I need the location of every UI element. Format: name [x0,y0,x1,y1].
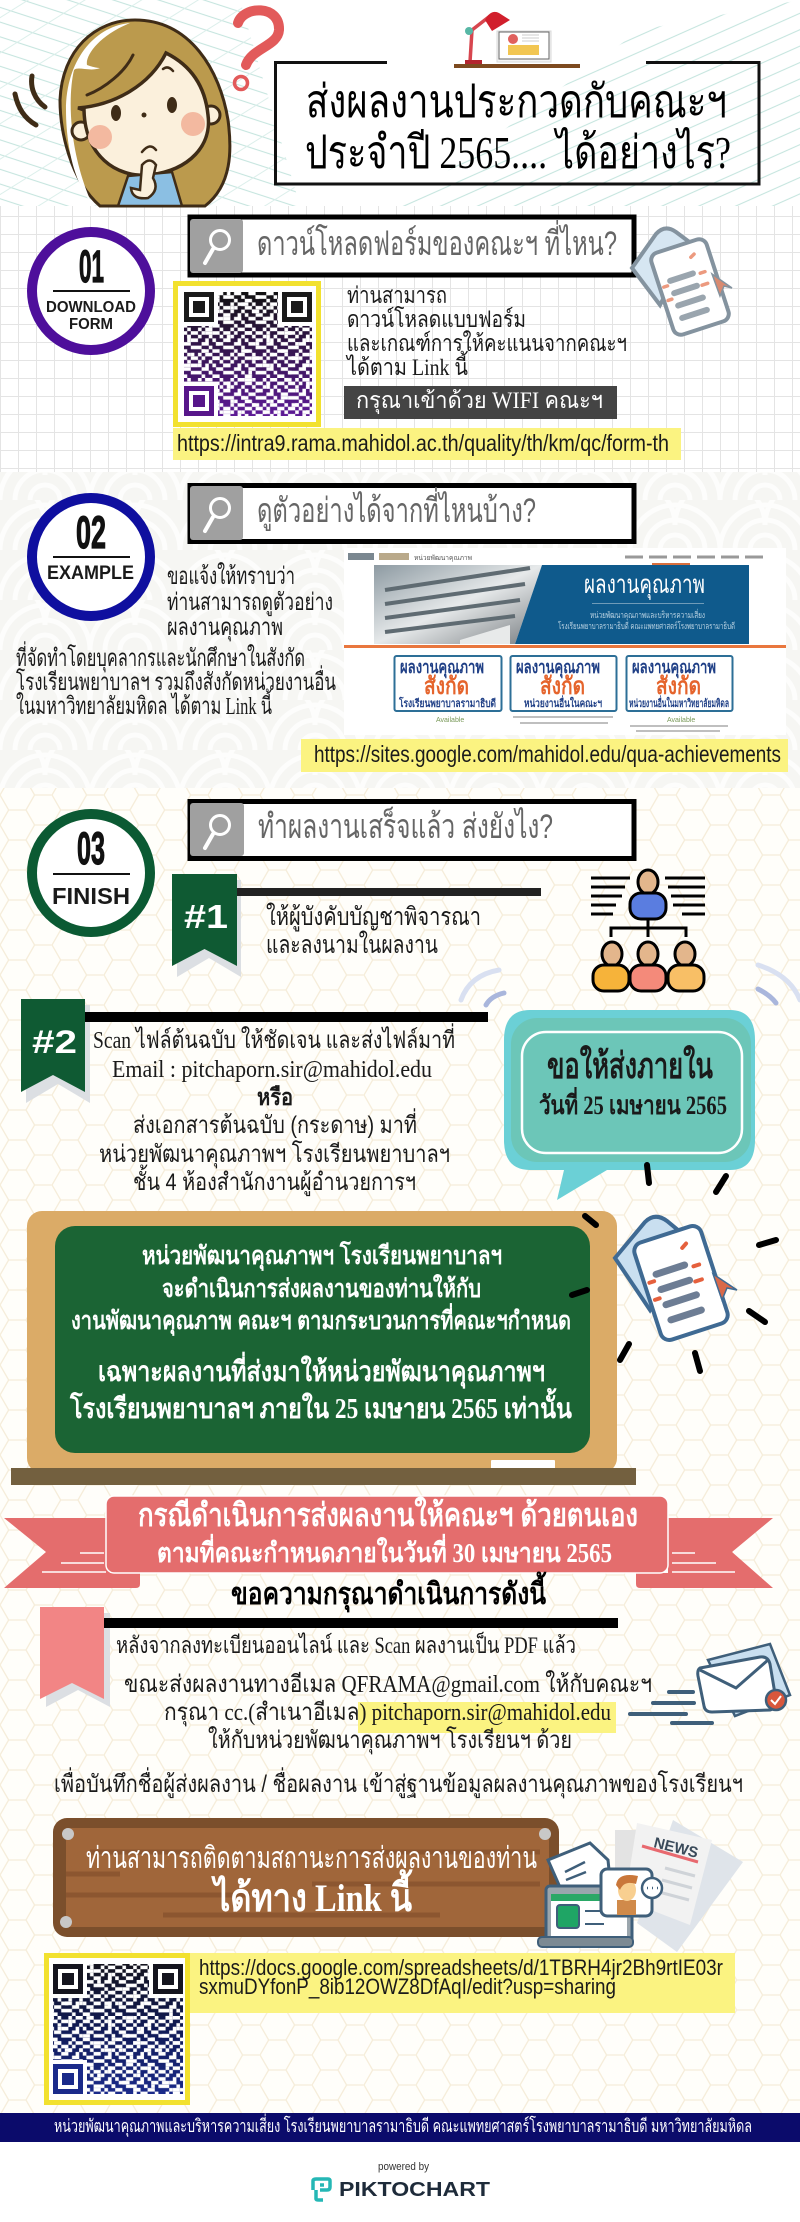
background: scallop section [0,472,800,788]
heading: please proceed: ขอความกรุณาดำเนินการดังนี้ [231,1571,547,1613]
icon: documents [632,228,732,337]
callout: deadline speech bubble: ขอให้ส่งภายใน [547,1044,713,1086]
title box [276,62,759,184]
pink ribbon and bar [40,1607,618,1707]
text: example info: ท่านสามารถดูตัวอย่าง [167,589,333,617]
badge 01 download form: FORM [69,316,113,333]
highlight: cc email [358,1702,616,1733]
instructions text: ขณะส่งผลงานทางอีเมล QFRAMA@gmail.com ให้กับคณะฯ [124,1670,652,1698]
step 2 text: Email : pitchaporn.sir@mahidol.edu [112,1057,432,1083]
link: status URL: https://docs.google.com/spreadsheets/d/1TBRH4jr2Bh9rtIE03r [199,1955,723,1980]
card: school: ผลงานคุณภาพ [400,657,484,679]
callout: deadline speech bubble: วันที่ 25 เมษายน 2565 [539,1086,727,1120]
instructions text: ให้กับหน่วยพัฒนาคุณภาพฯ โรงเรียนฯ ด้วย [208,1726,572,1755]
wooden sign: ได้ทาง Link นี้ [211,1869,413,1920]
title [305,76,731,178]
icon: flying envelope [630,1644,790,1723]
step 2 ribbon: #2 [32,1024,77,1060]
QR code 1 [176,284,318,424]
callout: deadline speech bubble [504,1010,755,1200]
banner: self-submission [4,1496,773,1588]
badge 01 download form: 01 [79,241,104,292]
card: faculty: หน่วยงานอื่นในคณะฯ [524,695,602,710]
step 2 text: ส่งเอกสารต้นฉบับ (กระดาษ) มาที่ [133,1108,417,1139]
card: school: สังกัด [424,673,469,700]
badge 02 example [32,498,150,616]
powered by Piktochart logo: PIKTOCHART [339,2179,490,2201]
card: school [394,656,502,711]
step 2 text: หรือ [257,1084,293,1110]
website screenshot: Available [436,717,464,724]
section 1 heading: search bar: ดาวน์โหลดฟอร์มของคณะฯ ที่ไหน? [257,220,617,263]
chalkboard: เฉพาะผลงานที่ส่งมาให้หน่วยพัฒนาคุณภาพฯ [98,1351,545,1389]
website screenshot: ผลงานคุณภาพ [584,569,705,600]
text: example info: ที่จัดทำโดยบุคลากรและนักศึกษาในสังกัด [16,641,305,673]
card: faculty: ผลงานคุณภาพ [516,657,600,679]
card: university [626,656,732,711]
badge 01 download form: DOWNLOAD [46,299,136,316]
step 1 text: และลงนามในผลงาน [266,930,438,959]
website screenshot [344,548,786,735]
section 2 heading: search bar [190,486,634,542]
powered by Piktochart logo: powered by [378,2161,429,2173]
chalkboard: งานพัฒนาคุณภาพ คณะฯ ตามกระบวนการที่คณะฯกำหนด [71,1303,571,1337]
background: grid section [0,206,800,472]
card: university: สังกัด [656,673,701,700]
badge 03 finish: FINISH [52,883,130,909]
link: status URL: sxmuDYfonP_8ib12OWZ8DfAqI/edit?usp=sharing [199,1974,616,1999]
card: faculty: สังกัด [540,673,585,700]
wooden sign: ท่านสามารถติดตามสถานะการส่งผลงานของท่าน [86,1842,537,1875]
step 2 text: หน่วยพัฒนาคุณภาพฯ โรงเรียนพยาบาลฯ [99,1140,450,1169]
banner: self-submission: กรณีดำเนินการส่งผลงานให้คณะฯ ด้วยตนเอง [138,1496,638,1533]
chalkboard: โรงเรียนพยาบาลฯ ภายใน 25 เมษายน 2565 เท่านั้น [69,1387,572,1425]
badge 03 finish: 03 [77,823,105,874]
step 2 text: Scan ไฟล์ต้นฉบับ ให้ชัดเจน และส่งไฟล์มาที่ [93,1023,455,1054]
icon: magnifier [205,816,230,848]
instructions text: กรุณา cc.(สำเนาอีเมล) pitchaporn.sir@mahidol.edu [164,1699,611,1727]
section 3 heading: search bar: ทำผลงานเสร็จแล้ว ส่งยังไง? [258,806,553,846]
text: example info: โรงเรียนพยาบาลฯ รวมถึงสังกัดหน่วยงานอื่น [16,665,336,696]
text: example info [16,562,336,720]
website screenshot: หน่วยพัฒนาคุณภาพ [414,554,472,562]
card: faculty [510,656,616,711]
chalkboard: จะดำเนินการส่งผลงานของท่านให้กับ [162,1273,481,1303]
text: download info: ดาวน์โหลดแบบฟอร์ม [347,306,526,332]
icon: organisation people [591,870,705,991]
background: grid lines [0,206,800,472]
icon: documents with burst [572,1216,776,1371]
banner: self-submission: ตามที่คณะกำหนดภายในวันที่ 30 เมษายน 2565 [157,1533,612,1568]
powered by Piktochart logo [313,2161,490,2201]
icon: news, laptop and person: NEWS [652,1834,700,1862]
text: example info: ในมหาวิทยาลัยมหิดล ได้ตาม Link นี้ [16,688,272,720]
link: status URL [190,1953,735,2013]
wooden sign [53,1818,559,1937]
icon: magnifier [205,230,230,263]
instructions text: หลังจากลงทะเบียนออนไลน์ และ Scan ผลงานเป็น PDF แล้ว [116,1630,576,1658]
background: honeycomb section [0,788,800,2113]
section 1 heading: search bar [190,217,634,275]
badge 01 download form [32,232,150,350]
card: school: โรงเรียนพยาบาลรามาธิบดี [398,696,496,710]
step 1 text: ให้ผู้บังคับบัญชาพิจารณา [266,902,481,932]
text: download info: ได้ตาม Link นี้ [345,351,468,380]
text: download info: ท่านสามารถ [347,282,447,308]
step 1 ribbon [172,874,541,977]
link: form URL: https://intra9.rama.mahidol.ac.th/quality/th/km/qc/form-th [177,430,669,456]
text: example info: ขอแจ้งให้ทราบว่า [167,562,295,590]
icon: lamp and laptop on desk [454,12,580,68]
step 2 text: ชั้น 4 ห้องสำนักงานผู้อำนวยการฯ [133,1164,416,1197]
text: download info: และเกณฑ์การให้คะแนนจากคณะฯ [347,330,627,356]
notice: wifi: กรุณาเข้าด้วย WIFI คณะฯ [356,388,603,414]
chalkboard: หน่วยพัฒนาคุณภาพฯ โรงเรียนพยาบาลฯ [142,1240,502,1272]
step 2 ribbon [21,999,488,1103]
badge 02 example: EXAMPLE [47,563,134,584]
badge 02 example: 02 [76,507,106,558]
website screenshot: หน่วยพัฒนาคุณภาพและบริหารความเสี่ยง [590,608,705,621]
badge 03 finish [32,814,150,932]
step 1 text [266,902,481,959]
section 3 heading: search bar [190,802,634,858]
decorative strokes around bubble [461,965,800,1192]
section 2 heading: search bar: ดูตัวอย่างได้จากที่ไหนบ้าง? [257,487,536,531]
QR code 2 [46,1956,188,2102]
text: example info: ผลงานคุณภาพ [167,614,283,642]
icon: news, laptop and person [538,1820,743,1952]
icon: question mark [234,10,279,90]
text: download info [345,282,627,380]
instructions text [54,1630,743,1799]
white footer [0,2142,800,2222]
card: university: ผลงานคุณภาพ [632,657,716,679]
website screenshot: Available [667,717,695,724]
illustration: thinking girl [15,20,230,206]
step 1 ribbon: #1 [184,898,228,935]
footer band [0,2113,800,2142]
chalkboard [11,1211,636,1485]
step 2 text [93,1023,455,1197]
card: university: หน่วยงานอื่นในมหาวิทยาลัยมหิดล [629,695,729,710]
icon: magnifier [205,498,230,531]
background: header lines [0,0,800,206]
